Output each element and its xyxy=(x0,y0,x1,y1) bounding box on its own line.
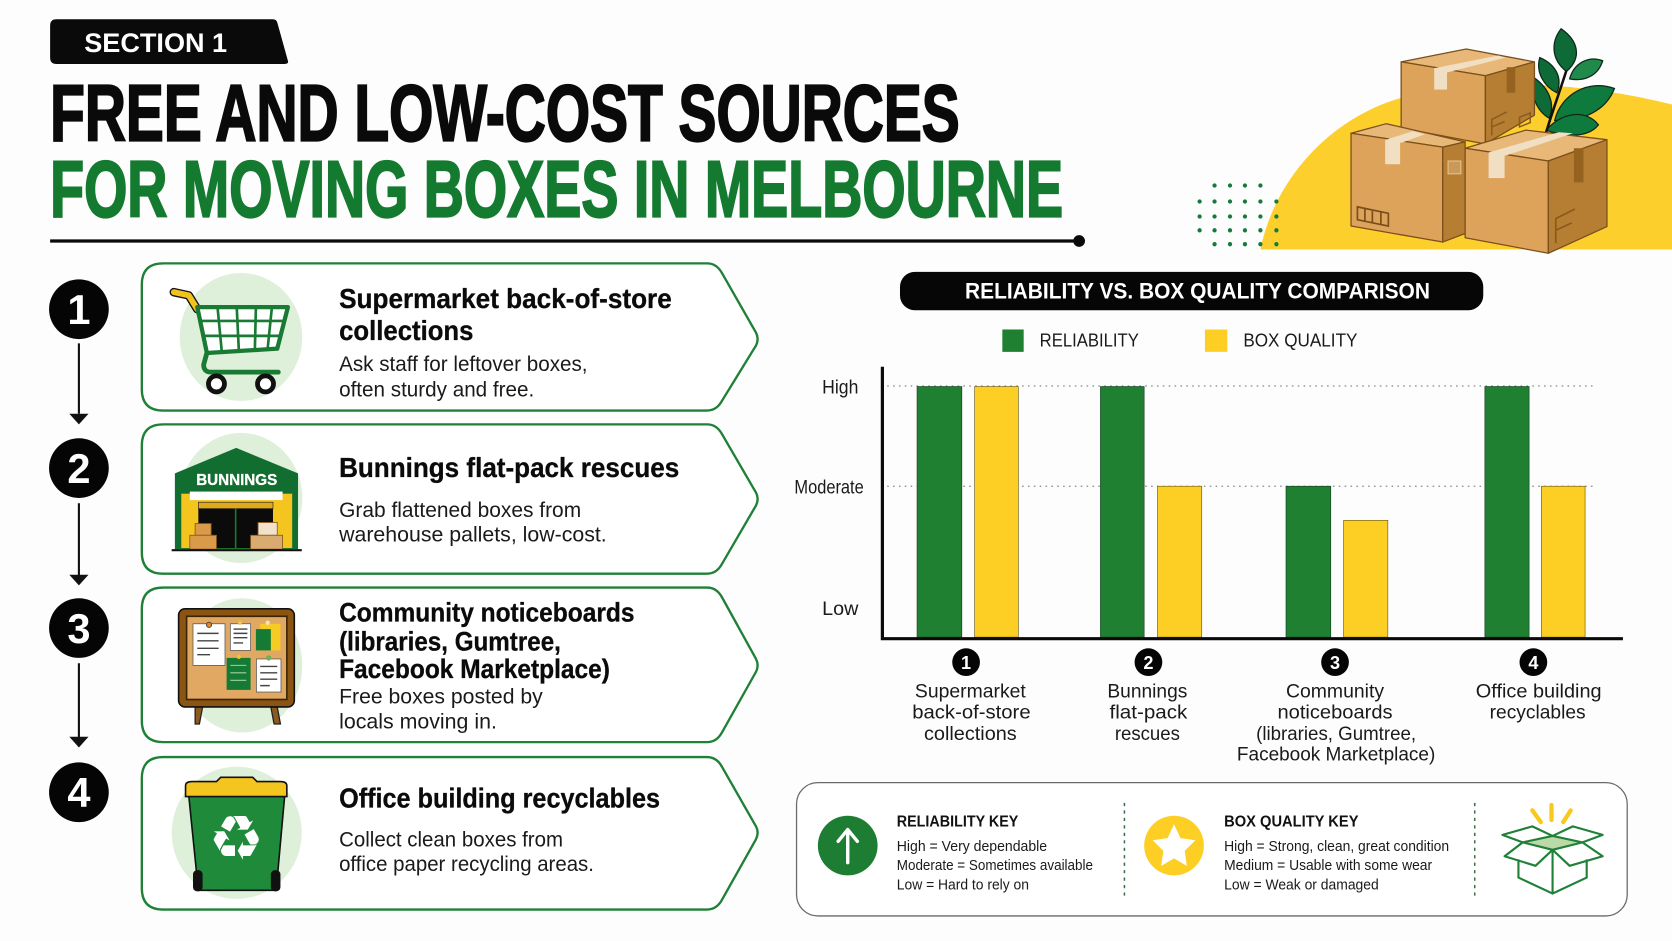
icon: noticeboard xyxy=(179,609,294,724)
category label 1: collections xyxy=(924,724,1017,745)
category label 4: recyclables xyxy=(1490,703,1586,724)
description: Grab flattened boxes from xyxy=(339,498,581,522)
category label 3: Community xyxy=(1286,681,1384,702)
section badge xyxy=(50,19,288,64)
panel: office recyclables xyxy=(142,757,758,910)
bars: supermarket xyxy=(917,387,1018,637)
icon: open box xyxy=(1502,805,1603,894)
box quality key text: BOX QUALITY KEY xyxy=(1224,813,1359,830)
step number 1: 1 xyxy=(67,286,90,333)
icon: warehouse: BUNNINGS xyxy=(196,472,278,489)
bars: community xyxy=(1286,486,1388,637)
plant xyxy=(1533,29,1614,135)
category label 3: 3 xyxy=(1330,653,1340,673)
icon: recycling bin: ♻ xyxy=(208,802,264,874)
description: Free boxes posted by xyxy=(339,685,543,709)
step number 3: 3 xyxy=(67,605,90,652)
title: FREE AND LOW-COST SOURCES xyxy=(50,69,960,158)
reliability key text: RELIABILITY KEY xyxy=(897,813,1019,830)
heading line 2: collections xyxy=(339,315,473,346)
y axis labels: Low xyxy=(822,599,859,620)
category label 3: noticeboards xyxy=(1277,703,1393,724)
heading: Community noticeboards xyxy=(339,598,634,628)
category label 4: 4 xyxy=(1528,653,1538,673)
description line 2: locals moving in. xyxy=(339,709,497,733)
step number 2: 2 xyxy=(67,445,90,492)
category label 1: Supermarket xyxy=(915,681,1026,702)
chart header xyxy=(900,272,1483,310)
reliability key text: Low = Hard to rely on xyxy=(897,876,1029,893)
description line 2: warehouse pallets, low-cost. xyxy=(338,523,607,547)
icon: shopping cart xyxy=(174,292,288,392)
title: FOR MOVING BOXES IN MELBOURNE xyxy=(50,144,1063,233)
description line 2: often sturdy and free. xyxy=(339,378,534,402)
panel: noticeboards xyxy=(142,588,758,742)
category label 1: back-of-store xyxy=(912,703,1031,724)
y axis labels: Moderate xyxy=(794,478,864,499)
step number 4 xyxy=(49,762,109,822)
y axis labels xyxy=(794,377,864,620)
description: Ask staff for leftover boxes, xyxy=(339,352,588,376)
panel: key xyxy=(797,783,1627,916)
arrow 1 to 2 xyxy=(69,343,89,424)
category label 3: (libraries, Gumtree, xyxy=(1256,724,1416,745)
category label 1: 1 xyxy=(961,653,971,673)
arrow 2 to 3 xyxy=(69,503,89,585)
legend: RELIABILITY xyxy=(1040,331,1139,351)
icon: recycling bin xyxy=(186,777,287,891)
category label 4 xyxy=(1476,648,1602,724)
section badge: SECTION 1 xyxy=(84,28,227,58)
heading line 3: Facebook Marketplace) xyxy=(339,654,610,684)
category label 1 xyxy=(912,648,1031,745)
heading: Supermarket back-of-store xyxy=(339,283,672,314)
icon: quality star xyxy=(1144,816,1204,875)
heading line 2: (libraries, Gumtree, xyxy=(339,626,561,656)
chart header: RELIABILITY VS. BOX QUALITY COMPARISON xyxy=(965,279,1430,304)
bars: office xyxy=(1485,387,1585,637)
heading: Office building recyclables xyxy=(339,783,660,814)
category label 2: Bunnings xyxy=(1107,681,1187,702)
left box xyxy=(1351,124,1465,242)
reliability key text: High = Very dependable xyxy=(897,838,1047,855)
description line 2: office paper recycling areas. xyxy=(339,852,594,876)
step number 1 xyxy=(49,279,109,339)
description: Collect clean boxes from xyxy=(339,828,563,852)
category label 2 xyxy=(1107,648,1188,745)
panel: bunnings xyxy=(142,424,758,574)
title xyxy=(50,69,1063,233)
category label 2: flat-pack xyxy=(1110,703,1188,724)
top box xyxy=(1401,49,1534,144)
step number 4: 4 xyxy=(67,769,90,816)
y axis labels: High xyxy=(822,377,858,398)
category label 2: 2 xyxy=(1143,653,1153,673)
legend: BOX QUALITY xyxy=(1243,331,1357,351)
category label 2: rescues xyxy=(1115,724,1180,745)
box quality key text: High = Strong, clean, great condition xyxy=(1224,838,1449,855)
hero illustration: cardboard boxes with plant xyxy=(1197,29,1672,253)
icon: warehouse xyxy=(172,448,302,550)
reliability key text xyxy=(897,813,1093,893)
heading: Bunnings flat-pack rescues xyxy=(339,452,679,483)
reliability key text: Moderate = Sometimes available xyxy=(897,857,1093,874)
category label 3 xyxy=(1237,648,1435,765)
box quality key text xyxy=(1224,813,1449,893)
icon: reliability arrow xyxy=(818,816,878,875)
category label 4: Office building xyxy=(1476,681,1602,702)
arrow 3 to 4 xyxy=(69,663,89,747)
panel: supermarket xyxy=(142,263,758,411)
box quality key text: Medium = Usable with some wear xyxy=(1224,857,1432,874)
right box xyxy=(1465,130,1607,253)
box quality key text: Low = Weak or damaged xyxy=(1224,876,1379,893)
step number 2 xyxy=(49,438,109,498)
step number 3 xyxy=(49,598,109,658)
title rule xyxy=(50,235,1085,247)
category label 3: Facebook Marketplace) xyxy=(1237,744,1435,765)
legend xyxy=(1002,329,1357,352)
bar chart xyxy=(794,367,1623,639)
bars: bunnings xyxy=(1100,387,1202,637)
